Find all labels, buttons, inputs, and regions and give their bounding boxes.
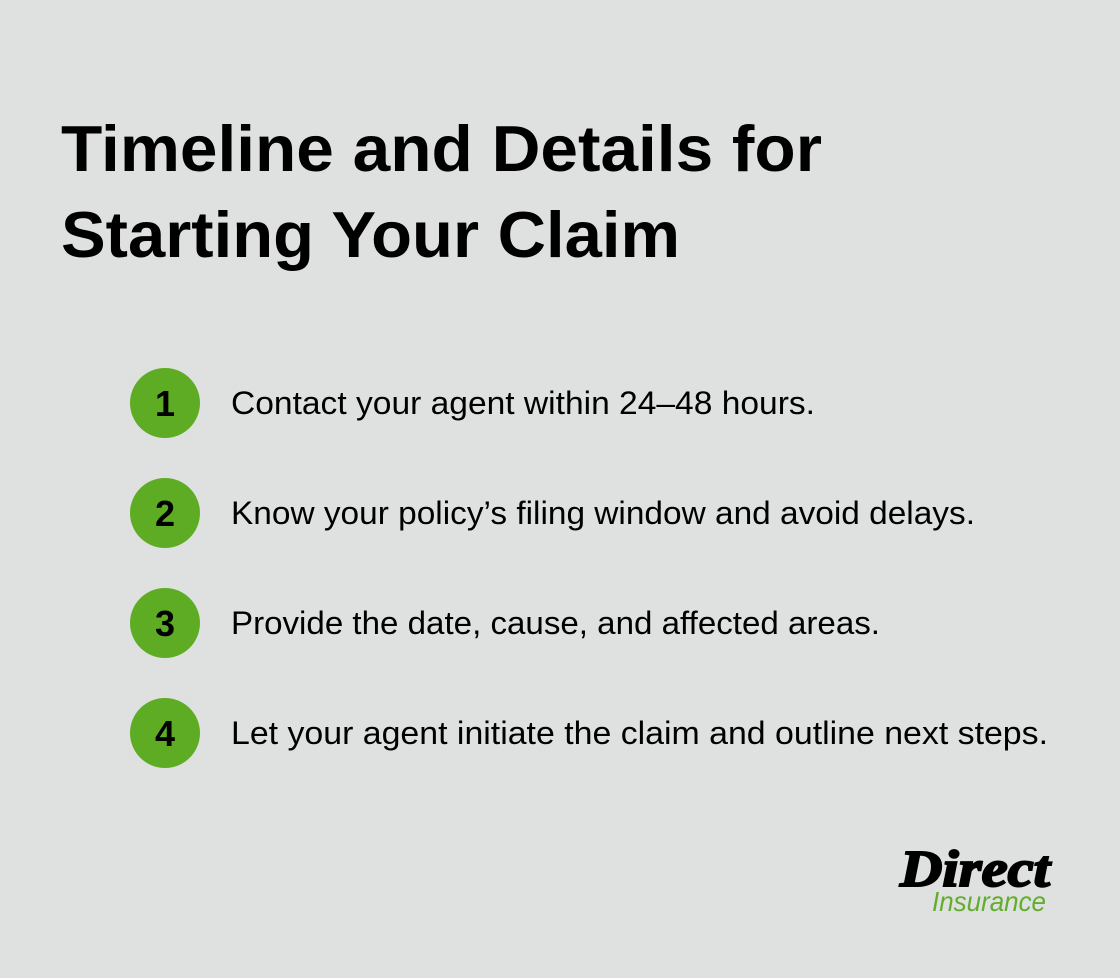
logo: Direct Insurance (899, 841, 1052, 917)
step 4: Let your agent initiate the claim and outline next steps. (231, 715, 1048, 751)
step 3: Provide the date, cause, and affected areas. (231, 605, 880, 641)
step 3 (130, 588, 880, 658)
title: Starting Your Claim (61, 198, 680, 271)
title: Timeline and Details for (61, 112, 822, 185)
logo: Direct Insurance: Direct (899, 841, 1052, 898)
step 1 (130, 368, 815, 438)
step 4 (130, 698, 1048, 768)
step 1: Contact your agent within 24–48 hours. (231, 385, 815, 421)
step 4: 4 (155, 713, 175, 754)
step 2 (130, 478, 975, 548)
step 2: 2 (155, 493, 175, 534)
step list (130, 368, 1048, 768)
logo: Direct Insurance: Insurance (932, 886, 1046, 917)
step 1: 1 (155, 383, 175, 424)
step 2: Know your policy’s filing window and avoid delays. (231, 495, 975, 531)
step 3: 3 (155, 603, 175, 644)
title (61, 112, 822, 271)
